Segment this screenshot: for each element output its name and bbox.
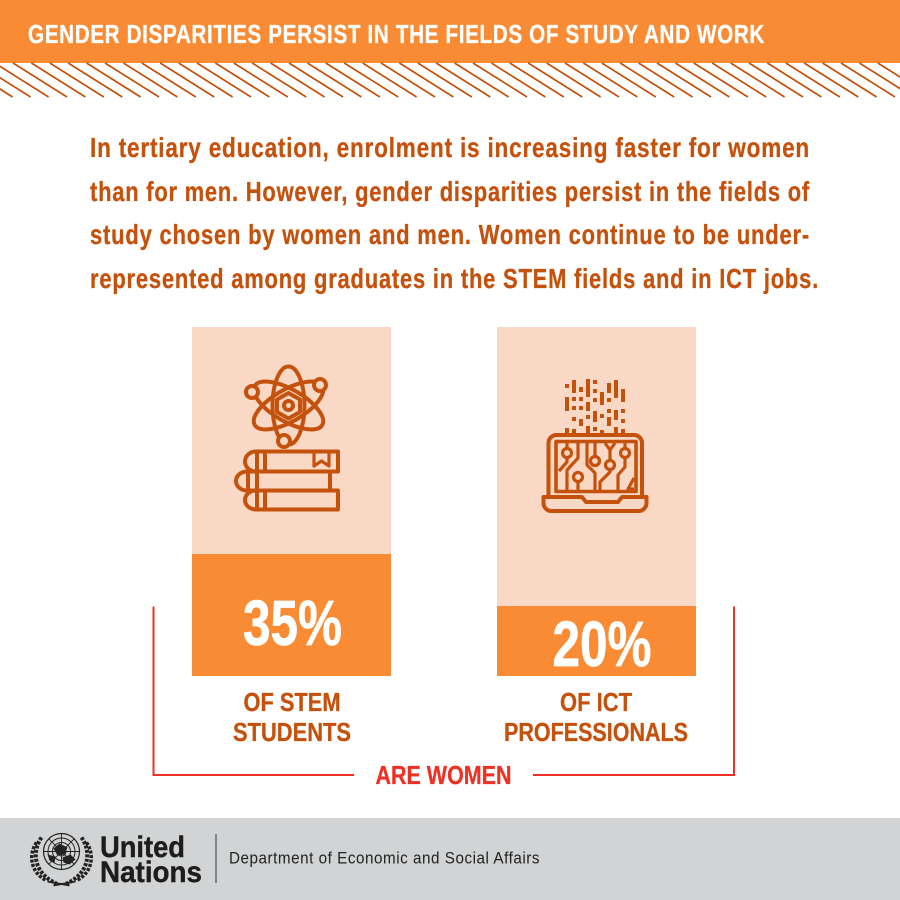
label: of ICT professionals: OF ICT xyxy=(560,687,632,717)
footer band xyxy=(0,818,900,900)
icon: UN emblem xyxy=(32,834,91,886)
hatched stripe band xyxy=(0,63,900,97)
panel: STEM students bar xyxy=(192,327,391,676)
intro paragraph xyxy=(90,132,819,294)
label: of ICT professionals: PROFESSIONALS xyxy=(504,717,688,747)
label: of STEM students: OF STEM xyxy=(244,687,340,717)
footer band: Nations xyxy=(100,856,202,889)
label: of ICT professionals xyxy=(504,687,688,747)
label: are women: ARE WOMEN xyxy=(376,760,512,790)
bracket linking both statistics xyxy=(154,606,734,775)
icon: atom above books xyxy=(236,366,338,510)
panel: ICT professionals bar xyxy=(497,327,696,680)
department name: Department of Economic and Social Affairs xyxy=(229,848,540,868)
label: of STEM students: STUDENTS xyxy=(233,717,351,747)
value: 20%: 20% xyxy=(552,608,652,680)
label: of STEM students xyxy=(233,687,351,747)
logo wordmark: United xyxy=(100,831,185,864)
header banner xyxy=(0,0,900,63)
value: 35%: 35% xyxy=(243,587,342,659)
icon: laptop with data bits xyxy=(544,435,646,511)
